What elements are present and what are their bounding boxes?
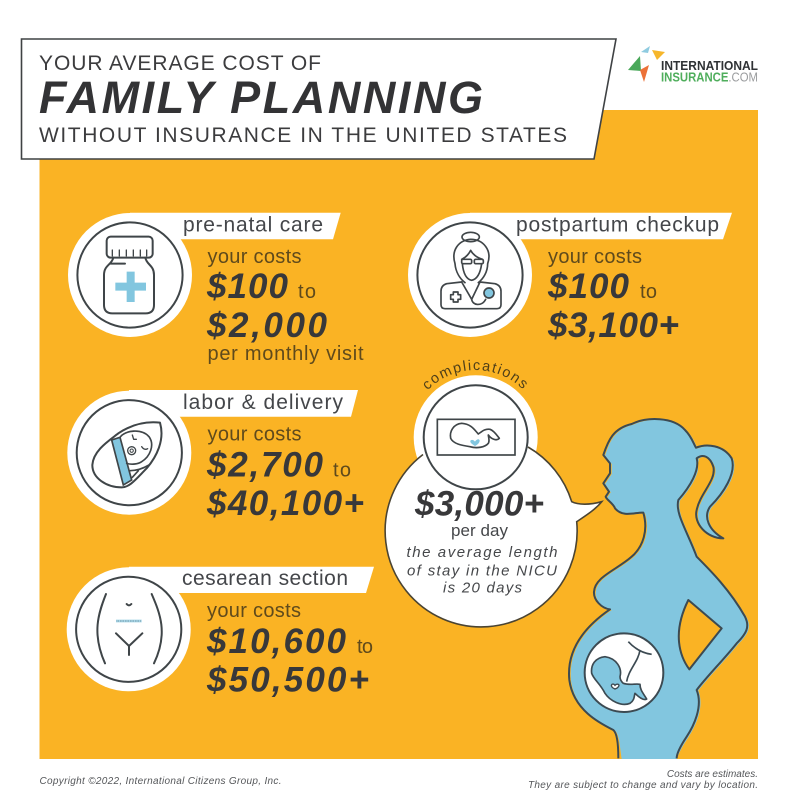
footer: copyright: Copyright ©2022, International Citizens Group, Inc. — [40, 776, 282, 787]
yellow background panel — [40, 110, 758, 759]
panel: pre-natal care: $100 — [206, 267, 289, 306]
panel: postpartum checkup — [408, 213, 732, 345]
panel: labor & delivery: to — [333, 460, 351, 482]
footer: disclaimer: They are subject to change and vary by location. — [528, 780, 758, 791]
icon: medicine bottle — [104, 237, 154, 313]
title banner: WITHOUT INSURANCE IN THE UNITED STATES — [39, 124, 567, 147]
logo: International Insurance.com — [628, 46, 758, 84]
panel: labor & delivery: labor & delivery — [183, 391, 344, 414]
woman silhouette — [569, 419, 749, 759]
speech bubble: complications: the average length — [406, 544, 558, 561]
panel: pre-natal care: $2,000 — [206, 306, 328, 345]
icon: fetus in womb — [592, 642, 652, 704]
panel: labor & delivery: $2,700 — [206, 446, 324, 485]
speech bubble: complications: $3,000+ — [414, 485, 544, 524]
icon: ultrasound screen — [437, 419, 515, 455]
panel: pre-natal care: per monthly visit — [208, 343, 364, 365]
panel: labor & delivery — [67, 390, 364, 523]
speech bubble: complications: of stay in the NICU — [407, 563, 557, 580]
panel: pre-natal care — [68, 213, 364, 365]
panel: postpartum checkup: $3,100+ — [547, 306, 679, 345]
logo: International Insurance.com: INSURANCE.COM — [661, 70, 758, 84]
speech bubble: complications: per day — [451, 521, 508, 540]
heading: complications curved label: complications — [424, 360, 527, 389]
panel: cesarean section: your costs — [207, 600, 301, 622]
footer: disclaimer: Costs are estimates. — [667, 769, 758, 780]
panel: cesarean section: to — [357, 636, 373, 658]
title banner: YOUR AVERAGE COST OF — [39, 52, 321, 75]
speech bubble: complications: is 20 days — [443, 580, 522, 597]
panel: pre-natal care: your costs — [208, 246, 302, 268]
panel: cesarean section — [67, 567, 374, 700]
panel: pre-natal care: to — [298, 281, 316, 303]
panel: labor & delivery: your costs — [208, 424, 302, 446]
panel: cesarean section: $50,500+ — [206, 661, 369, 700]
title banner: FAMILY PLANNING — [39, 72, 483, 123]
panel: postpartum checkup: to — [640, 281, 657, 303]
panel: postpartum checkup: postpartum checkup — [516, 214, 719, 236]
icon: swaddled baby — [92, 422, 161, 487]
icon: cesarean abdomen — [97, 594, 162, 663]
logo: International Insurance.com: INTERNATIONAL — [661, 59, 758, 73]
panel: labor & delivery: $40,100+ — [206, 484, 364, 523]
speech bubble: complications — [384, 360, 604, 628]
footer: disclaimer — [528, 769, 758, 791]
title banner — [22, 39, 616, 159]
icon: doctor with stethoscope — [441, 232, 501, 309]
panel: postpartum checkup: your costs — [548, 246, 642, 268]
panel: postpartum checkup: $100 — [547, 267, 630, 306]
panel: cesarean section: $10,600 — [206, 622, 347, 661]
panel: cesarean section: cesarean section — [182, 567, 348, 590]
panel: pre-natal care: pre-natal care — [183, 214, 323, 236]
